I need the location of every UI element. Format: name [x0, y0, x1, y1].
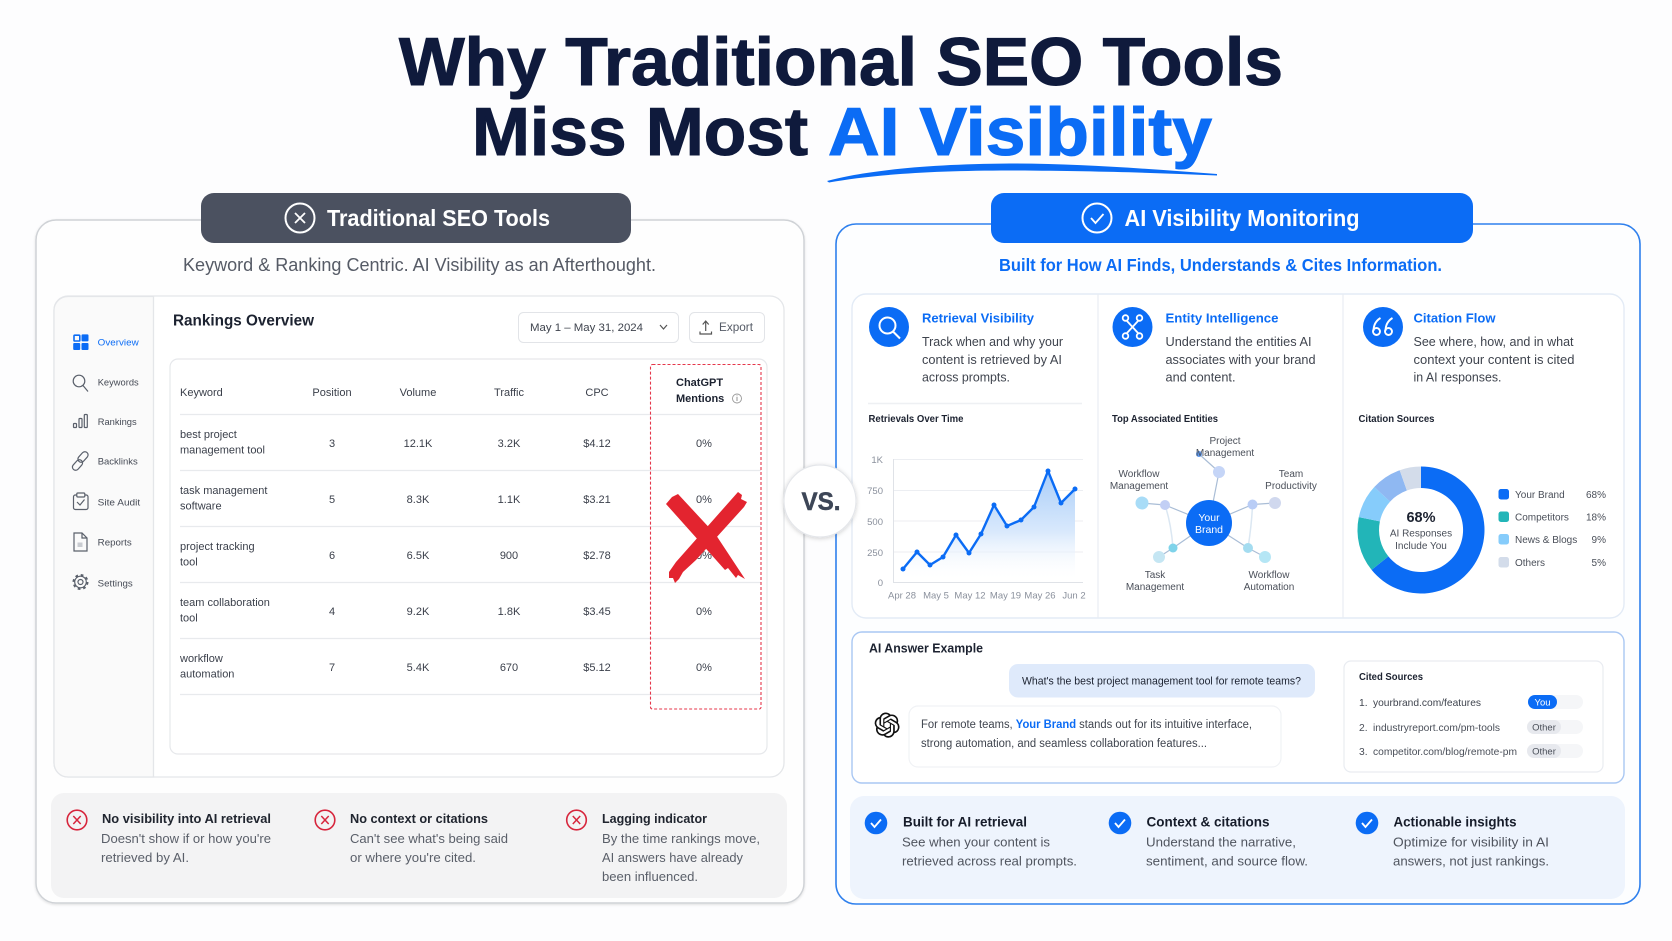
source: yourbrand: 1. — [1359, 698, 1368, 709]
center node: your brand: Brand — [1195, 524, 1223, 536]
row: workflow automation: workflow — [179, 653, 223, 665]
diagram: top associated entities: Management — [1126, 582, 1184, 593]
app mockup — [54, 296, 784, 777]
limitation: no visibility: Doesn't show if or how you're — [101, 831, 271, 846]
nav: settings — [74, 575, 133, 590]
legend: Others — [1515, 558, 1545, 569]
title — [399, 24, 1283, 170]
benefit: actionable insights — [1356, 812, 1549, 868]
chart: citation sources donut — [1357, 413, 1606, 593]
diagram: top associated entities: Management — [1110, 481, 1168, 492]
feature: entity intelligence — [1112, 307, 1316, 384]
heading pill: AI visibility monitoring: AI Visibility Monitoring — [1124, 205, 1360, 231]
source: yourbrand — [1359, 695, 1583, 709]
donut: 68% — [1406, 510, 1436, 526]
dashed highlight: ChatGPT mentions column — [650, 364, 761, 709]
feature: citation flow: context your content is cited — [1414, 353, 1575, 367]
benefit: context and citations: Context & citations — [1146, 814, 1270, 830]
limitation: no context: No context or citations — [350, 811, 488, 826]
row: team collaboration tool: team collaboration — [180, 597, 270, 609]
row: team collaboration tool: $3.45 — [583, 606, 611, 618]
row: team collaboration tool: 1.8K — [498, 606, 521, 618]
feature: retrieval visibility: across prompts. — [922, 370, 1010, 384]
chart: citation sources donut: Citation Sources — [1358, 413, 1435, 425]
legend — [1498, 489, 1606, 569]
row: team collaboration tool — [180, 597, 712, 624]
table header — [180, 377, 742, 405]
nav: keywords — [73, 375, 139, 392]
row: best project management tool — [180, 429, 712, 456]
feature: retrieval visibility: Track when and why your — [922, 335, 1063, 349]
panel: traditional SEO tools — [36, 193, 804, 903]
icon: red X over column — [666, 492, 747, 583]
legend: Your Brand — [1515, 490, 1565, 501]
center node: your brand: Your — [1198, 512, 1220, 524]
row: task management software: 8.3K — [407, 494, 430, 506]
rankings overview heading: Rankings Overview — [173, 312, 315, 330]
VS badge: VS. — [802, 488, 840, 516]
icon: network — [1112, 307, 1152, 347]
row: task management software: $3.21 — [583, 494, 611, 506]
limitation: no visibility: retrieved by AI. — [101, 850, 189, 865]
chart: retrievals over time: Retrievals Over Time — [868, 413, 964, 425]
chart: retrievals over time: 0 — [878, 578, 883, 589]
AI answer example: AI Answer Example — [869, 642, 983, 656]
benefit: actionable insights: answers, not just rankings. — [1393, 854, 1549, 868]
donut: Include You — [1395, 541, 1447, 552]
row: task management software: 5 — [329, 494, 335, 506]
diagram: top associated entities: Productivity — [1265, 481, 1317, 492]
heading pill: AI visibility monitoring — [991, 193, 1473, 243]
source: competitor: 3. — [1359, 747, 1368, 758]
row: best project management tool: 12.1K — [404, 438, 433, 450]
feature: entity intelligence: and content. — [1166, 370, 1236, 384]
benefit: context and citations — [1109, 812, 1308, 868]
question bubble — [1009, 664, 1315, 698]
table header: ChatGPT — [676, 377, 723, 389]
chart: retrievals over time: May 19 — [990, 590, 1021, 602]
donut: AI Responses — [1390, 528, 1452, 540]
title: Miss Most — [472, 94, 808, 170]
benefit: built for AI retrieval: retrieved across real prompts. — [902, 854, 1077, 868]
row: workflow automation: 5.4K — [407, 662, 430, 674]
row: project tracking tool: $2.78 — [583, 550, 611, 562]
heading pill: traditional SEO tools — [201, 193, 631, 243]
diagram: top associated entities: Workflow — [1249, 570, 1290, 581]
table header: Traffic — [494, 387, 524, 399]
limitation: lagging indicator: By the time rankings move, — [602, 831, 760, 846]
feature: citation flow: Citation Flow — [1414, 310, 1496, 326]
nav: settings: Settings — [98, 578, 133, 590]
source: industryreport: Other — [1532, 722, 1556, 734]
source: competitor: Other — [1532, 746, 1556, 758]
legend: 68% — [1586, 490, 1606, 501]
diagram: top associated entities: Task — [1145, 570, 1166, 581]
chart: retrievals over time: May 5 — [923, 590, 949, 602]
legend: Competitors — [1515, 512, 1569, 524]
benefits strip — [850, 796, 1625, 899]
nav: backlinks: Backlinks — [98, 456, 138, 468]
diagram: top associated entities — [1110, 413, 1317, 593]
row: workflow automation: 670 — [500, 662, 518, 674]
chart: retrievals over time: 250 — [867, 548, 883, 559]
limitations strip — [51, 793, 787, 898]
benefit: actionable insights: Actionable insights — [1394, 814, 1516, 830]
row: best project management tool: management tool — [180, 444, 265, 456]
nav: keywords: Keywords — [98, 378, 139, 388]
row: workflow automation: 7 — [329, 662, 335, 674]
diagram: top associated entities: Top Associated Entities — [1112, 413, 1218, 425]
feature: entity intelligence: Understand the entities AI — [1166, 335, 1312, 349]
limitation: lagging indicator: AI answers have already — [602, 850, 744, 865]
table header: CPC — [585, 387, 609, 399]
benefit: built for AI retrieval — [865, 812, 1077, 868]
source: industryreport: industryreport.com/pm-tools — [1373, 723, 1500, 734]
chart: retrievals over time: 500 — [867, 517, 883, 528]
source: competitor — [1359, 744, 1583, 758]
sidebar navigation — [71, 334, 141, 590]
nav: overview: Overview — [98, 338, 139, 348]
date range dropdown — [518, 312, 678, 342]
answer bubble: strong automation, and seamless collaboration features... — [921, 738, 1207, 750]
nav: rankings: Rankings — [98, 417, 137, 428]
nav: overview — [73, 334, 139, 350]
nav: site audit: Site Audit — [98, 498, 141, 508]
export button — [690, 312, 764, 342]
limitation: no context — [315, 810, 508, 865]
feature: citation flow: in AI responses. — [1414, 370, 1502, 384]
feature: entity intelligence: Entity Intelligence — [1166, 310, 1278, 326]
row: project tracking tool: 0% — [696, 550, 712, 562]
row: best project management tool: 3.2K — [498, 438, 521, 450]
legend: 18% — [1586, 512, 1606, 524]
chart: retrievals over time: Jun 2 — [1062, 590, 1086, 602]
feature: citation flow: See where, how, and in what — [1414, 335, 1574, 349]
heading pill: traditional SEO tools: Traditional SEO Tools — [327, 205, 550, 231]
feature: retrieval visibility: Retrieval Visibility — [922, 310, 1035, 326]
icon: search — [869, 307, 909, 347]
icon: ChatGPT logo — [875, 712, 900, 738]
benefit: actionable insights: Optimize for visibility in AI — [1393, 834, 1549, 850]
nav: rankings — [74, 414, 137, 428]
benefit: context and citations: sentiment, and source flow. — [1146, 854, 1308, 868]
feature: entity intelligence: associates with your brand — [1166, 353, 1316, 367]
nav: site audit — [74, 493, 141, 510]
diagram: top associated entities: Management — [1196, 448, 1254, 459]
row: team collaboration tool: 9.2K — [407, 606, 430, 618]
legend: News & Blogs — [1515, 535, 1577, 546]
row: project tracking tool: 6 — [329, 550, 335, 562]
limitation: no visibility: No visibility into AI retrieval — [102, 811, 271, 826]
row: task management software: software — [180, 500, 222, 512]
limitation: no visibility — [67, 810, 271, 865]
chart: retrievals over time: May 26 — [1024, 590, 1056, 602]
limitation: lagging indicator — [567, 810, 760, 884]
table header: Volume — [400, 387, 436, 399]
limitation: lagging indicator: been influenced. — [602, 869, 698, 884]
benefit: context and citations: Understand the narrative, — [1146, 834, 1296, 850]
row: project tracking tool: tool — [180, 556, 198, 568]
icon: quotes — [1363, 307, 1403, 347]
row: project tracking tool — [180, 541, 712, 568]
rankings table — [170, 359, 767, 754]
row: best project management tool: $4.12 — [583, 438, 611, 450]
diagram: top associated entities: Project — [1209, 436, 1241, 447]
nav: reports: Reports — [98, 538, 132, 548]
source: industryreport — [1359, 720, 1583, 734]
center node: your brand — [1186, 500, 1232, 546]
donut — [1357, 466, 1484, 593]
row: best project management tool: 3 — [329, 438, 335, 450]
cited sources: Cited Sources — [1359, 671, 1423, 683]
source: yourbrand: You — [1534, 698, 1551, 708]
chart: retrievals over time: Apr 28 — [888, 590, 916, 602]
nav: backlinks — [71, 450, 138, 472]
source: yourbrand: yourbrand.com/features — [1373, 698, 1481, 709]
table header: Keyword — [180, 387, 223, 399]
diagram: top associated entities: Workflow — [1119, 469, 1160, 480]
legend: 5% — [1592, 558, 1606, 569]
row: project tracking tool: 900 — [500, 550, 518, 562]
date range dropdown: May 1 – May 31, 2024 — [530, 322, 643, 334]
row: team collaboration tool: 0% — [696, 606, 712, 618]
answer bubble — [909, 706, 1281, 767]
row: project tracking tool: project tracking — [180, 541, 255, 553]
row: best project management tool: best project — [180, 429, 237, 441]
feature: retrieval visibility — [869, 307, 1063, 384]
diagram: top associated entities: Automation — [1244, 582, 1294, 593]
chart: retrievals over time — [867, 413, 1086, 602]
AI answer example — [852, 632, 1624, 783]
table header: Mentions — [676, 393, 724, 405]
chart: retrievals over time: 750 — [867, 486, 883, 497]
VS badge — [784, 465, 856, 537]
row: team collaboration tool: 4 — [329, 606, 335, 618]
row: task management software: 1.1K — [498, 494, 521, 506]
chart: retrievals over time: May 12 — [954, 590, 986, 602]
cited sources — [1344, 661, 1603, 772]
limitation: lagging indicator: Lagging indicator — [602, 811, 707, 826]
subtitle: Keyword & Ranking Centric. AI Visibility as an Afterthought. — [183, 254, 656, 275]
source: competitor: competitor.com/blog/remote-pm — [1373, 747, 1517, 758]
export button: Export — [719, 322, 754, 334]
question bubble: What's the best project management tool for remote teams? — [1022, 676, 1301, 688]
row: workflow automation: 0% — [696, 662, 712, 674]
answer bubble: For remote teams, Your Brand stands out for its intuitive interface, — [921, 719, 1252, 731]
legend: 9% — [1592, 535, 1606, 546]
row: task management software: task management — [180, 485, 267, 497]
panel: AI visibility monitoring — [836, 193, 1640, 904]
row: workflow automation — [179, 653, 712, 680]
limitation: no context: or where you're cited. — [350, 850, 476, 865]
limitation: no context: Can't see what's being said — [350, 831, 508, 846]
row: best project management tool: 0% — [696, 438, 712, 450]
feature cards — [852, 294, 1624, 618]
row: workflow automation: $5.12 — [583, 662, 611, 674]
title underline swoosh — [827, 164, 1217, 182]
title: AI Visibility — [828, 94, 1212, 170]
row: task management software — [180, 485, 712, 512]
source: industryreport: 2. — [1359, 723, 1368, 734]
nav: reports — [74, 533, 132, 551]
row: workflow automation: automation — [180, 668, 234, 680]
row: project tracking tool: 6.5K — [407, 550, 430, 562]
chart: retrievals over time: 1K — [871, 455, 884, 466]
diagram: top associated entities: Team — [1279, 469, 1303, 480]
table header: Position — [312, 387, 352, 399]
row: task management software: 0% — [696, 494, 712, 506]
title: Why Traditional SEO Tools — [399, 24, 1283, 100]
benefit: built for AI retrieval: Built for AI retrieval — [903, 814, 1027, 830]
feature: citation flow — [1363, 307, 1575, 384]
feature: retrieval visibility: content is retrieved by AI — [922, 353, 1062, 367]
subtitle: Built for How AI Finds, Understands & Cites Information. — [999, 255, 1442, 275]
row: team collaboration tool: tool — [180, 612, 198, 624]
benefit: built for AI retrieval: See when your content is — [902, 834, 1050, 850]
